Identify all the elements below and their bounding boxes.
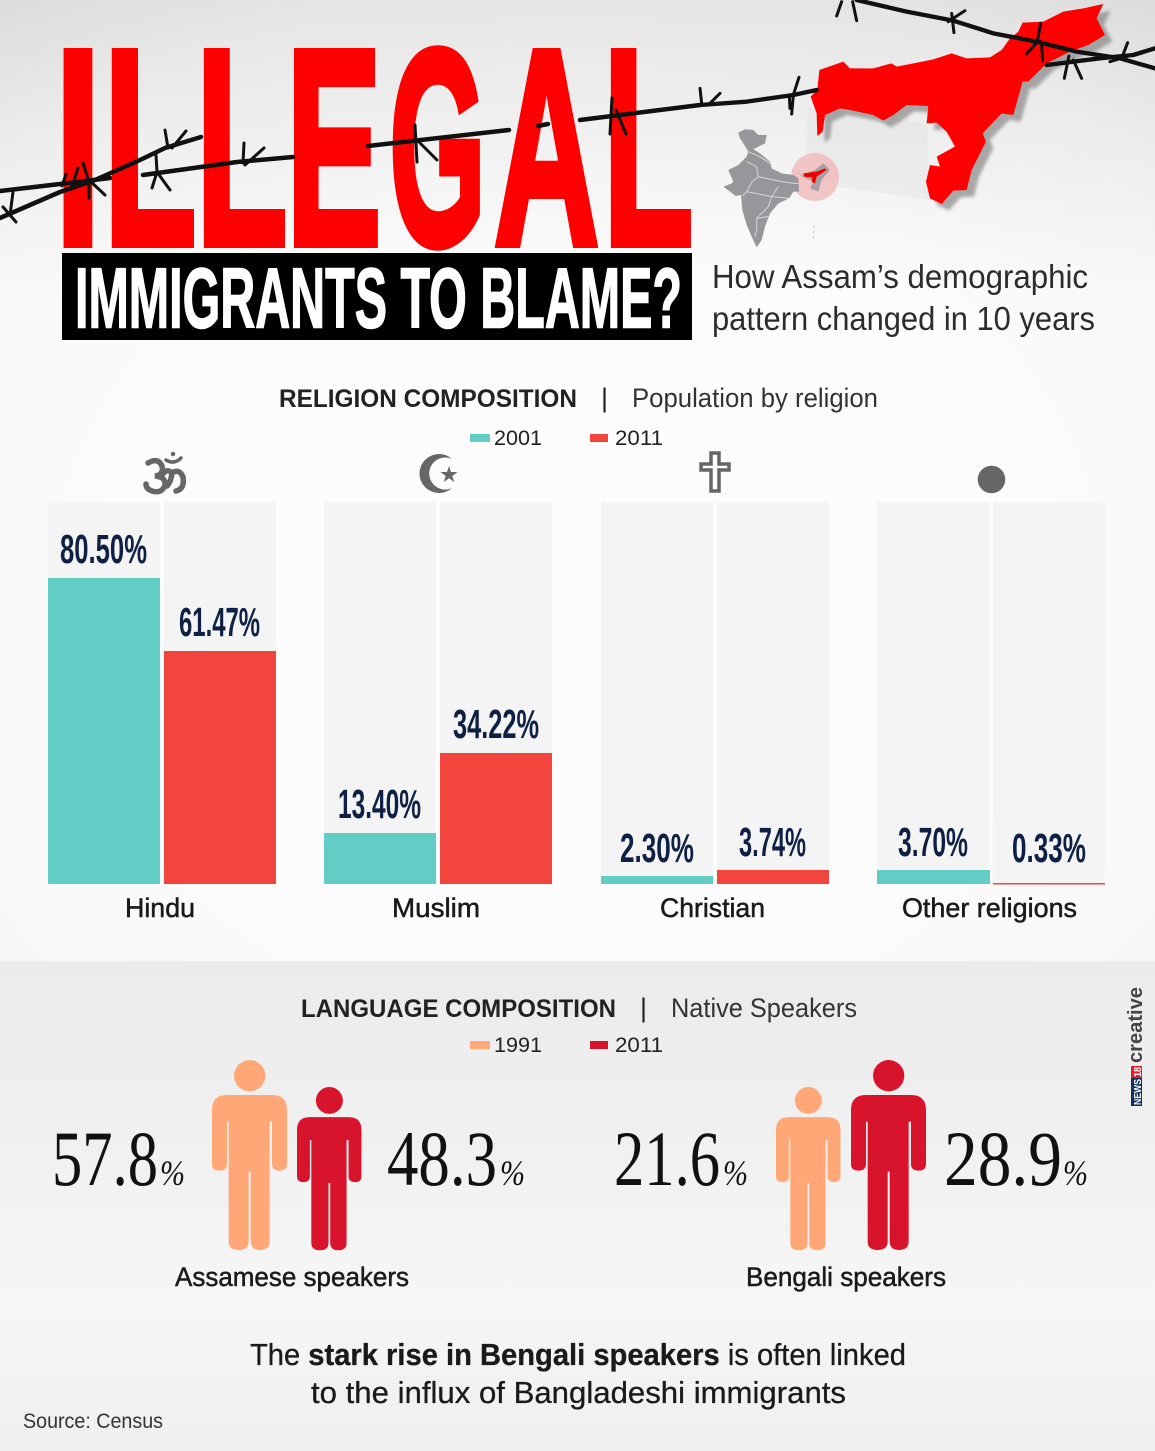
map: India with Assam highlighted	[723, 129, 830, 247]
legend: religion	[470, 427, 663, 450]
label: Bengali speakers: Bengali speakers	[746, 1262, 946, 1292]
legend: language: 2011	[615, 1034, 663, 1057]
label: Assamese speakers: Assamese speakers	[175, 1262, 409, 1292]
logo: News18 creative: NEWS	[1133, 1079, 1144, 1105]
stat: Bengali 1991: %	[723, 1153, 748, 1193]
icon: cross	[701, 453, 729, 491]
subtitle banner: IMMIGRANTS TO BLAME?	[75, 252, 682, 346]
bar chart: Other religions: 3.70%	[898, 819, 968, 865]
title: ILLEGAL: E	[286, 0, 381, 304]
bar chart: Christian: 2.30%	[620, 825, 694, 871]
icon: crescent and star	[419, 454, 458, 493]
conclusion text	[250, 1337, 906, 1410]
barbed wire: right	[700, 0, 1155, 114]
logo: News18 creative: 18	[1133, 1067, 1144, 1077]
stat: Bengali 2011: %	[1063, 1153, 1088, 1193]
intro text: How Assam’s demographic	[712, 258, 1088, 295]
bar chart: Muslim: 34.22%	[453, 701, 539, 747]
bar chart: Christian: Christian	[660, 893, 765, 923]
heading: language composition	[301, 993, 857, 1023]
heading: religion composition	[279, 383, 878, 413]
bar chart: Christian: 3.74%	[739, 819, 806, 865]
legend: religion: 2011	[615, 427, 663, 450]
stat: Bengali 1991: 21.6	[614, 1115, 720, 1202]
heading: language composition: LANGUAGE COMPOSITION	[301, 995, 616, 1023]
bar chart: Muslim: Muslim	[392, 893, 480, 923]
person: Bengali 2011	[851, 1060, 926, 1250]
heading: religion composition: RELIGION COMPOSITION	[279, 385, 577, 413]
map: Assam large	[811, 4, 1112, 211]
bar chart: Other religions: Other religions	[902, 893, 1077, 923]
title: ILLEGAL: L	[104, 0, 196, 304]
title: ILLEGAL: L	[603, 0, 693, 304]
bar chart: Hindu	[48, 502, 276, 923]
person: Assamese 1991	[212, 1060, 287, 1250]
title: ILLEGAL: A	[494, 0, 599, 304]
heading: religion composition: Population by religion	[632, 383, 878, 413]
title: ILLEGAL: L	[196, 0, 288, 304]
bar chart: Christian	[601, 502, 829, 923]
bar chart: Muslim: 13.40%	[338, 781, 421, 827]
logo: News18 creative: creative	[1125, 987, 1147, 1063]
stat: Bengali 2011: 28.9	[944, 1115, 1062, 1202]
bar chart: Hindu: 61.47%	[179, 599, 260, 645]
conclusion text: The stark rise in Bengali speakers is often linked	[250, 1337, 906, 1372]
title: ILLEGAL: G	[389, 0, 486, 304]
bar chart: Hindu: 80.50%	[60, 526, 147, 572]
subtitle banner	[62, 252, 692, 346]
bar chart: Hindu: Hindu	[125, 893, 195, 923]
stat: Assamese 2011: 48.3	[387, 1115, 497, 1202]
stat: Assamese 1991: 57.8	[52, 1115, 158, 1202]
title: ILLEGAL: I	[55, 0, 101, 304]
person: Assamese 2011	[297, 1087, 361, 1250]
barbed wire: left	[0, 98, 700, 222]
conclusion text: to the influx of Bangladeshi immigrants	[311, 1375, 846, 1410]
stat: Assamese 1991: %	[160, 1153, 185, 1193]
person: Bengali 1991	[776, 1087, 840, 1250]
bar chart: Muslim	[324, 502, 552, 923]
intro text	[712, 258, 1095, 337]
heading: language composition: Native Speakers	[671, 993, 857, 1023]
intro text: pattern changed in 10 years	[712, 300, 1095, 337]
map callout beam and circle	[791, 107, 930, 201]
heading: religion composition: |	[601, 383, 608, 413]
source: Source: Census	[23, 1410, 163, 1433]
legend: language: 1991	[494, 1034, 542, 1057]
bar chart: Other religions: 0.33%	[1012, 825, 1086, 871]
legend: language	[470, 1034, 663, 1057]
icon: other religions dot	[978, 466, 1005, 493]
logo: News18 creative	[1125, 987, 1147, 1106]
bar chart: Other religions	[877, 502, 1105, 923]
heading: language composition: |	[640, 993, 647, 1023]
icon: om	[146, 452, 183, 492]
legend: religion: 2001	[494, 427, 542, 450]
stat: Assamese 2011: %	[500, 1153, 525, 1193]
